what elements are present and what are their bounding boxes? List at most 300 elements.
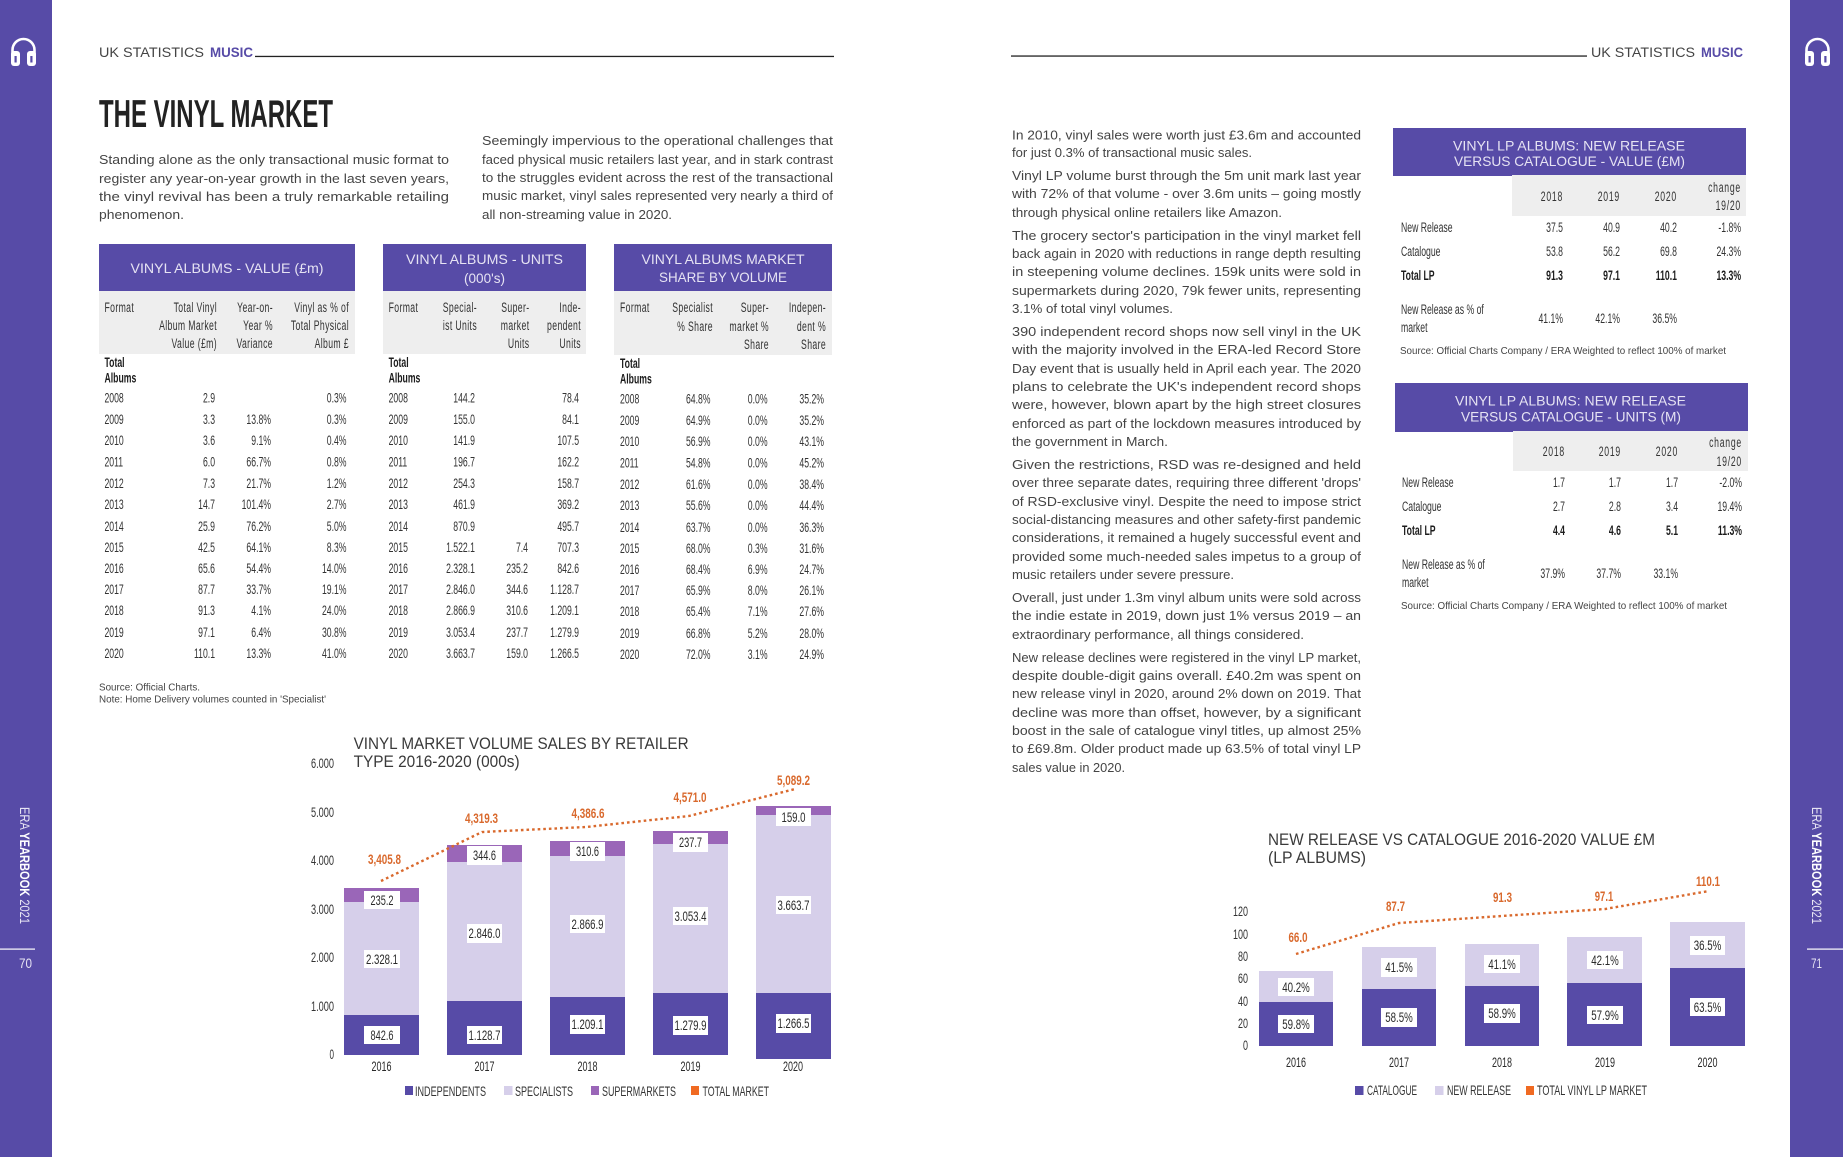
column heads [1543,435,1742,470]
data rows: 162.2 [557,454,579,470]
data rows: 30.8% [322,625,347,641]
running header right: MUSIC [1701,45,1743,60]
legend: TOTAL MARKET [702,1083,769,1099]
column heads: Inde- [559,300,581,316]
row group label: Albums [620,372,652,387]
data rows: 54.4% [246,561,271,577]
data rows: 2017 [620,583,639,599]
intro text column 1: phenomenon. [99,207,184,222]
intro text column 2 [482,133,833,222]
column heads: 2019 [1599,444,1621,460]
column heads: change [1708,180,1741,196]
table: new release vs catalogue units [1395,383,1748,612]
data rows: 237.7 [506,625,528,641]
data rows: 7.1% [748,604,768,620]
x axis years: 2017 [1389,1054,1409,1070]
data rows: 2017 [389,582,408,598]
data rows: 76.2% [246,519,271,535]
row group label [104,355,136,386]
body text right page: to £69.8m. Older product made up 63.5% of total vinyl LP [1012,741,1361,756]
row group label: Total [389,355,409,371]
data rows: 37.9% [1540,566,1565,582]
total market dotted line [381,789,795,881]
bar 2016: 842.6 [370,1027,394,1043]
body text right page: over three separate dates, requiring three different 'drops' [1012,475,1361,490]
data rows: 24.0% [322,603,347,619]
data rows: 40.9 [1603,220,1620,236]
data rows: 0.3% [748,541,768,557]
y axis: 3.000 [311,901,334,917]
y axis: 60 [1238,970,1248,986]
data rows: 2019 [389,625,408,641]
title: THE VINYL MARKET [99,93,333,136]
bar 2018 [550,841,625,1055]
legend: SPECIALISTS [515,1083,573,1099]
panel: left sidebar [0,0,52,1157]
data rows: 2015 [620,541,639,557]
icon: headphones right [1805,39,1830,66]
chart title [1268,830,1655,867]
body text right page: Day event that is usually held in April each year. The 2020 [1012,361,1361,376]
data rows: 2008 [620,392,639,407]
bar 2019 [1567,937,1642,1046]
data rows: 33.7% [246,582,271,598]
body text right page [1011,127,1362,775]
column heads [104,300,349,352]
data rows: 2018 [104,603,124,619]
data rows: 2012 [620,477,639,493]
column heads: 2019 [1598,189,1620,205]
y axis: 0 [330,1046,334,1062]
y axis: 1.000 [311,998,334,1014]
data rows: 254.3 [453,476,475,492]
data rows: 2008 [389,391,408,406]
bar 2020: 3.663.7 [778,897,810,913]
intro text column 2: to the struggles evident across the rest of the transactional [482,170,833,185]
data rows: 9.1% [251,433,271,449]
total market values: 4,571.0 [674,789,707,805]
total market values: 4,386.6 [572,805,605,821]
body text right page: The grocery sector's participation in the vinyl market fell [1012,228,1361,243]
bar 2017: 344.6 [473,847,496,863]
data rows: New Release [1401,220,1453,236]
data rows: New Release [1402,475,1454,491]
body text right page: boost in the sale of catalogue vinyl titles, up almost 25% [1012,723,1361,738]
data rows: 56.2 [1603,244,1620,260]
data rows: 2017 [104,582,124,598]
data rows: 2018 [620,604,639,620]
bar 2019: 57.9% [1591,1007,1619,1023]
data rows: 25.9 [198,519,215,535]
data rows: 310.6 [506,603,528,619]
row group label: Total [104,355,125,371]
data rows: 461.9 [453,497,475,513]
bar 2018: 58.9% [1488,1005,1516,1021]
data rows: 38.4% [799,477,824,493]
column heads: market [501,318,530,334]
column heads: Variance [236,336,273,352]
data rows: 0.4% [327,433,347,449]
data rows: 2020 [620,647,640,663]
bar 2016: 40.2% [1282,979,1310,995]
total market values: 66.0 [1288,929,1308,945]
row group label: Total [620,356,640,372]
data rows: 2011 [104,454,123,470]
column heads: Super- [501,300,529,316]
data rows: 66.8% [686,626,711,642]
row group label [620,356,652,387]
data rows: 2.7% [327,497,347,513]
bar 2020: 1.266.5 [778,1015,810,1031]
body text right page: with 72% of that volume - over 3.6m units – going mostly [1011,186,1362,201]
column heads: dent % [797,319,826,335]
data rows: 5.2% [748,626,768,642]
y axis: 0 [1243,1037,1248,1053]
y axis: 4.000 [311,852,334,868]
y axis: 5.000 [311,804,334,820]
data rows: 87.7 [198,582,215,598]
data rows: 36.3% [799,520,824,536]
data rows: 2019 [104,625,124,641]
intro text column 1 [99,152,449,222]
data rows: 1.522.1 [446,540,475,556]
data rows: 28.0% [799,626,824,642]
data rows: 3.3 [203,412,215,428]
table heading: VINYL LP ALBUMS: NEW RELEASE [1455,393,1686,409]
data rows: 6.4% [251,625,271,641]
data rows: 69.8 [1660,244,1677,260]
chart title: VINYL MARKET VOLUME SALES BY RETAILER [354,734,689,753]
table heading: VINYL ALBUMS - UNITS [406,251,563,267]
total market values: 3,405.8 [368,851,401,867]
y axis: 120 [1233,903,1248,919]
data rows: 110.1 [194,646,215,662]
column heads: Format [104,300,134,316]
data rows: 2015 [389,540,408,556]
data rows: 7.4 [516,540,528,556]
x axis years: 2020 [783,1058,803,1074]
data rows: -1.8% [1718,220,1741,236]
data rows: 64.8% [686,392,711,407]
data rows: 4.6 [1609,523,1621,539]
data rows: 2011 [389,454,407,470]
total market dotted line [1296,891,1709,954]
data rows: 2010 [620,434,640,450]
data rows: 65.4% [686,604,711,620]
data rows: 2020 [389,646,408,662]
intro text column 2: all non-streaming value in 2020. [482,207,672,222]
bar 2018: 2.866.9 [572,916,604,932]
data rows: 97.1 [1603,268,1620,284]
data rows: 3.663.7 [446,646,475,662]
data rows: 2016 [620,562,639,578]
table heading [642,251,805,285]
row group label: Albums [104,371,136,386]
x axis years: 2018 [1492,1054,1512,1070]
column heads [389,300,581,352]
data rows: 8.0% [748,583,768,599]
data rows: 0.0% [748,498,768,514]
data rows: market [1401,320,1428,336]
body text right page: Vinyl LP volume burst through the 5m unit mark last year [1012,168,1362,183]
data rows: 3.053.4 [446,625,475,641]
column heads: Units [559,336,581,352]
body text right page: were, however, blown apart by the high street closures [1011,397,1361,412]
body text right page: 3.1% of total vinyl volumes. [1012,301,1173,316]
data rows: Catalogue [1402,499,1442,515]
data rows: 2018 [389,603,408,619]
data rows: 2.9 [203,391,215,406]
y axis: 6.000 [311,755,334,771]
sidebar label: ERA YEARBOOK 2021 [1809,807,1824,924]
x axis years [372,1058,803,1074]
body text right page: through physical online retailers like Amazon. [1012,205,1282,220]
data rows: 2013 [104,497,124,513]
table: market share by volume [614,244,832,663]
data rows: 37.5 [1546,220,1563,236]
data rows: 2009 [620,413,639,429]
column heads: ist Units [443,318,477,334]
data rows: 110.1 [1656,268,1677,284]
body text right page: Overall, just under 1.3m vinyl album units were sold across [1012,590,1361,605]
bar 2016 [344,888,419,1055]
bar 2019: 3.053.4 [674,908,707,924]
data rows: 2.7 [1553,499,1565,515]
x axis years: 2016 [372,1058,392,1074]
body text right page: provided some much-needed sales impetus to a group of [1012,549,1361,564]
total market values: 5,089.2 [777,772,810,788]
body text right page: for just 0.3% of transactional music sales. [1012,145,1252,160]
body text right page: back again in 2020 with reductions in range depth resulting [1012,246,1361,261]
intro text column 2: music market, vinyl sales represented very nearly a third of [482,188,833,203]
bar 2020: 63.5% [1694,999,1721,1015]
data rows: 2020 [104,646,124,662]
bar 2016: 2.328.1 [366,951,398,967]
legend: NEW RELEASE [1447,1082,1511,1098]
data rows: 26.1% [799,583,824,599]
data rows [1402,475,1743,591]
body text right page: sales value in 2020. [1012,760,1125,775]
chart: vinyl market volume sales by retailer [311,734,831,1099]
bar 2017 [447,845,522,1055]
data rows: 0.0% [748,413,768,429]
legend: CATALOGUE [1367,1082,1417,1098]
page number 70: 70 [19,955,32,971]
data rows: 2013 [620,498,639,514]
column heads: 2018 [1541,189,1563,205]
data rows: 43.1% [799,434,824,450]
data rows: 2011 [620,455,639,471]
icon: headphones left [11,39,36,66]
legend: INDEPENDENTS [415,1083,486,1099]
data rows: 84.1 [562,412,579,428]
intro text column 2: Seemingly impervious to the operational challenges that [482,133,833,148]
table: new release vs catalogue value [1393,128,1746,357]
data rows: 78.4 [562,391,579,406]
data rows: 35.2% [799,413,824,429]
table heading [1455,393,1686,425]
chart: new release vs catalogue value [1233,830,1745,1098]
data rows: 11.3% [1718,523,1743,539]
data rows: 14.0% [322,561,347,577]
bar 2019: 237.7 [679,834,702,850]
y axis [1233,903,1248,1053]
data rows: 6.9% [748,562,768,578]
table heading: (000's) [464,270,505,286]
data rows: 14.7 [198,497,215,513]
data rows: 41.1% [1538,311,1563,327]
body text right page: Given the restrictions, RSD was re-designed and held [1012,457,1361,472]
column heads: Units [508,336,529,352]
bar 2017: 2.846.0 [468,925,501,941]
data rows: 19.1% [322,582,347,598]
data rows: 97.1 [198,625,215,641]
legend: SUPERMARKETS [602,1083,676,1099]
row group label: Albums [389,371,420,386]
data rows: 2014 [104,519,124,535]
running header left: MUSIC [210,45,253,60]
column heads: Format [389,300,418,316]
data rows: 842.6 [557,561,579,577]
data rows: 0.0% [748,520,768,536]
x axis years: 2019 [1595,1054,1615,1070]
data rows: 0.0% [748,392,768,407]
data rows: 24.7% [799,562,824,578]
body text right page: extraordinary performance, all things considered. [1012,627,1304,642]
data rows: 2013 [389,497,408,513]
total market values: 110.1 [1696,873,1720,889]
data rows: 63.7% [686,520,711,536]
data rows: 1.128.7 [550,582,579,598]
body text right page: of RSD-exclusive vinyl. Despite the need to impose strict [1012,494,1361,509]
data rows: 3.6 [203,433,215,449]
table heading [1453,138,1685,169]
sidebar label: ERA YEARBOOK 2021 [17,807,32,924]
y axis: 40 [1238,993,1248,1009]
row group label [389,355,420,386]
chart title: NEW RELEASE VS CATALOGUE 2016-2020 VALUE £M [1268,830,1655,849]
body text right page: music retailers under severe pressure. [1012,567,1234,582]
data rows: 1.7 [1553,475,1565,491]
bar 2018: 41.1% [1488,956,1516,972]
bar 2016 [1259,971,1333,1046]
data rows: 36.5% [1652,311,1677,327]
data rows: 54.8% [686,455,711,471]
bar 2018: 310.6 [576,843,599,859]
running header right: UK STATISTICS [1591,45,1695,60]
body text right page: new release vinyl in 2020, around 2% down on 2019. That [1012,686,1361,701]
data rows: 45.2% [799,455,824,471]
bar 2016: 235.2 [370,892,394,908]
table heading: VERSUS CATALOGUE - VALUE (£M) [1454,153,1685,169]
data rows: 144.2 [453,391,475,406]
data rows: 707.3 [557,540,579,556]
table: vinyl albums value [99,244,355,662]
legend: TOTAL VINYL LP MARKET [1537,1082,1647,1098]
data rows: 0.0% [748,434,768,450]
legend [1355,1082,1647,1098]
data rows: 13.3% [246,646,271,662]
data rows: 2008 [104,391,124,406]
source note: Source: Official Charts. [99,682,200,694]
source: Source: Official Charts Company / ERA Weighted to reflect 100% of market [1401,600,1727,612]
data rows: 158.7 [557,476,579,492]
data rows: 66.7% [246,454,271,470]
data rows: 19.4% [1717,499,1742,515]
data rows: 2009 [389,412,408,428]
column heads: Share [801,337,826,353]
column heads: Year-on- [237,300,273,316]
bar 2017: 58.5% [1385,1009,1413,1025]
y axis: 20 [1238,1015,1248,1031]
x axis years: 2017 [474,1058,495,1074]
data rows: market [1402,575,1429,591]
table heading [406,251,563,286]
intro text column 1: register any year-on-year growth in the last seven years, [99,171,449,186]
body text right page: with the majority involved in the ERA-led Record Store [1011,342,1361,357]
source note [99,682,326,706]
data rows: 24.3% [1716,244,1741,260]
data rows: 2.328.1 [446,561,475,577]
bar 2020 [756,806,831,1059]
total market values: 4,319.3 [465,810,498,826]
data rows: -2.0% [1719,475,1742,491]
column heads: 19/20 [1716,198,1741,214]
intro text column 1: Standing alone as the only transactional music format to [99,152,449,167]
body text right page: In 2010, vinyl sales were worth just £3.6m and accounted [1012,127,1361,142]
data rows: 6.0 [203,454,215,470]
bar 2019: 42.1% [1591,952,1619,968]
data rows: New Release as % of [1402,557,1485,573]
data rows [1401,220,1742,336]
data rows: 1.209.1 [550,603,579,619]
data rows: 64.1% [246,540,271,556]
source: Source: Official Charts Company / ERA Weighted to reflect 100% of market [1400,345,1726,357]
data rows: 0.0% [748,477,768,493]
data rows: 4.4 [1553,523,1565,539]
column heads: Format [620,300,650,316]
data rows: Total LP [1401,268,1435,284]
data rows: 2016 [104,561,124,577]
body text right page: plans to celebrate the UK's independent record shops [1012,379,1361,394]
data rows: 65.9% [686,583,711,599]
data rows: 2015 [104,540,124,556]
data rows: 13.3% [1716,268,1742,284]
page number 71: 71 [1811,955,1822,971]
table heading: SHARE BY VOLUME [659,269,787,285]
data rows [389,391,579,662]
column heads: Specialist [672,300,713,316]
body text right page: considerations, it remained a hugely successful event and [1012,530,1361,545]
x axis years [1286,1054,1718,1070]
running header left [99,45,834,60]
data rows: 2010 [104,433,124,449]
bar 2019 [653,831,728,1055]
data rows: 1.7 [1666,475,1678,491]
bar 2018: 1.209.1 [572,1016,604,1032]
body text right page: supermarkets during 2020, 79k fewer units, representing [1012,283,1361,298]
data rows: 495.7 [557,519,579,535]
data rows: 2010 [389,433,408,449]
data rows: 5.1 [1666,523,1678,539]
total market values: 91.3 [1493,889,1512,905]
data rows: 235.2 [506,561,528,577]
data rows: 40.2 [1660,220,1677,236]
data rows: 0.8% [327,454,347,470]
column heads: Vinyl as % of [294,300,349,316]
running header left: UK STATISTICS [99,45,204,60]
x axis years: 2016 [1286,1054,1306,1070]
